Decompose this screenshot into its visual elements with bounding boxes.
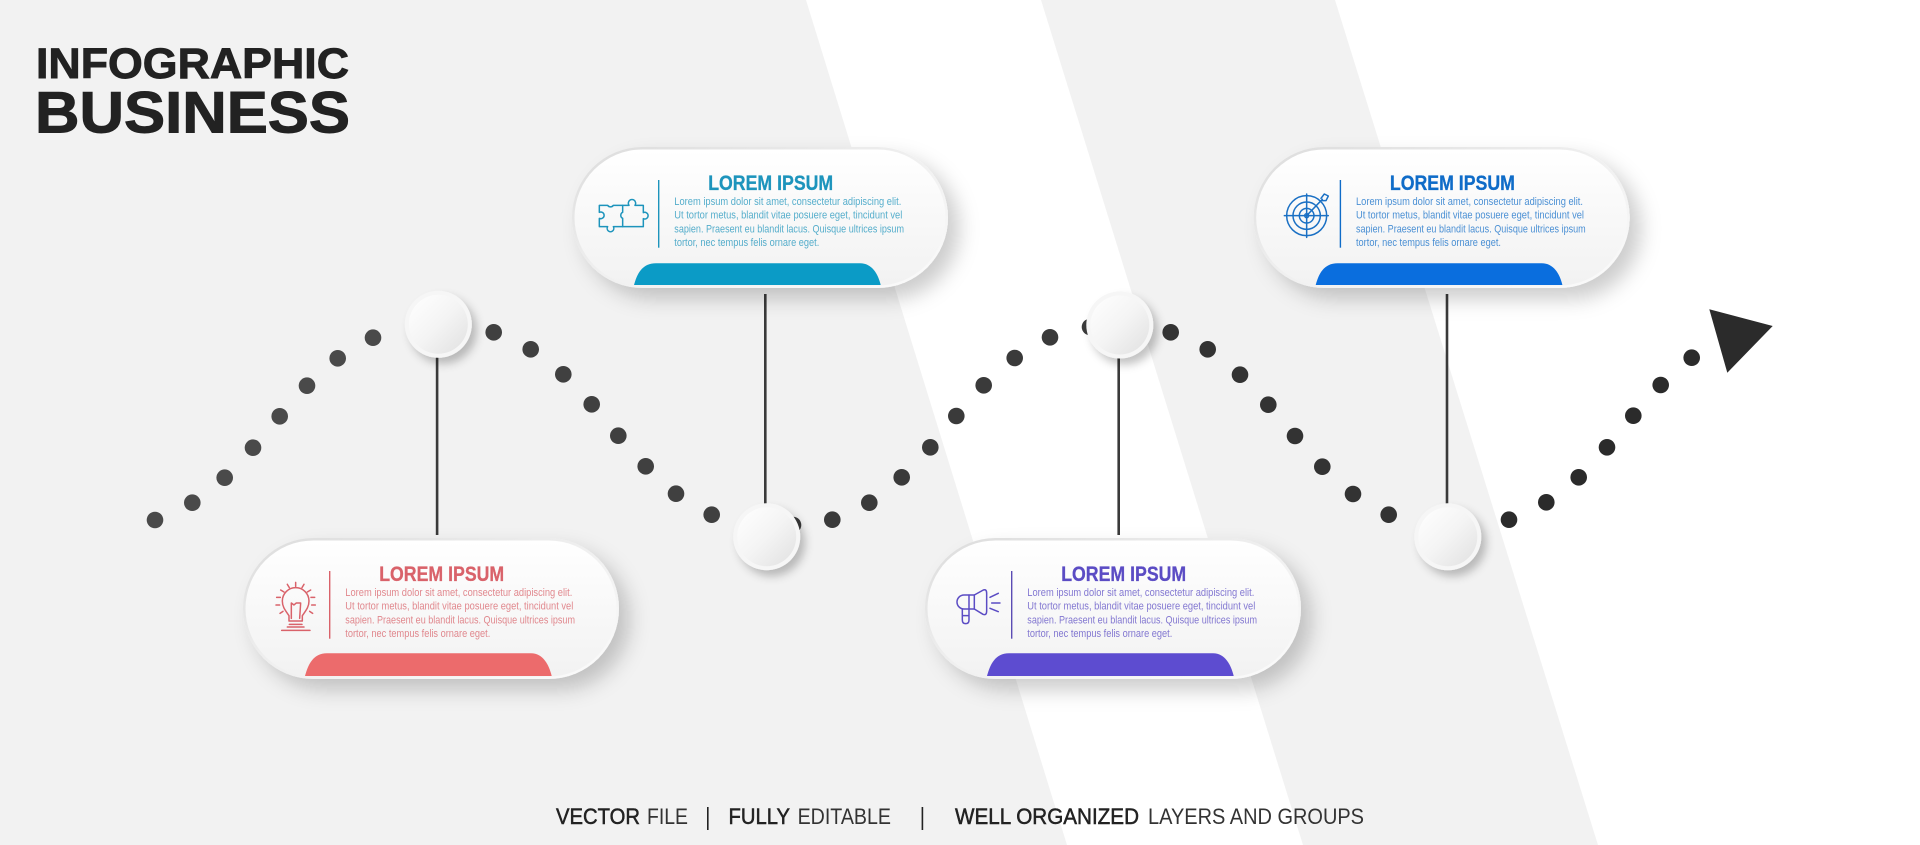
text block: Lorem ipsum dolor sit amet, consectetur adipiscing elit. bbox=[345, 587, 572, 599]
icon: puzzle bbox=[599, 200, 648, 232]
icon: target bbox=[1284, 194, 1328, 237]
panel: teal card bbox=[572, 147, 948, 288]
dots: first fall bbox=[485, 324, 720, 523]
heading: LOREM IPSUM bbox=[708, 172, 833, 195]
text block: Ut tortor metus, blandit vitae posuere eget, tincidunt vel bbox=[674, 210, 902, 222]
text block: tortor, nec tempus felis ornare eget. bbox=[1356, 237, 1501, 249]
dots: second fall bbox=[1162, 324, 1397, 523]
text block: sapien. Praesent eu blandit lacus. Quisque ultrices ipsum bbox=[345, 614, 575, 626]
icon: megaphone bbox=[957, 590, 1000, 624]
node circles bbox=[405, 291, 1481, 570]
panel: pink card bbox=[243, 538, 619, 679]
node 1 bbox=[405, 291, 472, 358]
text block bbox=[1356, 196, 1586, 249]
title bbox=[35, 40, 350, 146]
panel: purple card bbox=[925, 538, 1301, 679]
footer text: LAYERS AND GROUPS bbox=[1148, 804, 1364, 829]
text block: Lorem ipsum dolor sit amet, consectetur adipiscing elit. bbox=[1356, 196, 1583, 208]
dotted path with arrow bbox=[147, 309, 1773, 533]
dots: final rise bbox=[1501, 349, 1700, 528]
heading: LOREM IPSUM bbox=[1390, 172, 1515, 195]
text block bbox=[1027, 587, 1257, 640]
heading: LOREM IPSUM bbox=[379, 563, 504, 586]
footer text: FILE bbox=[647, 804, 688, 829]
text block: tortor, nec tempus felis ornare eget. bbox=[674, 237, 819, 249]
icon: light bulb bbox=[276, 582, 315, 630]
arrow head bbox=[1709, 309, 1773, 373]
text block: Ut tortor metus, blandit vitae posuere eget, tincidunt vel bbox=[345, 601, 573, 613]
title: INFOGRAPHIC bbox=[36, 40, 349, 88]
dots: second rise bbox=[785, 319, 1098, 533]
node 2 bbox=[733, 503, 800, 570]
node 4 bbox=[1414, 503, 1481, 570]
text block: Ut tortor metus, blandit vitae posuere eget, tincidunt vel bbox=[1356, 210, 1584, 222]
node 3 bbox=[1086, 292, 1153, 358]
text block: Ut tortor metus, blandit vitae posuere eget, tincidunt vel bbox=[1027, 601, 1255, 613]
text block: sapien. Praesent eu blandit lacus. Quisque ultrices ipsum bbox=[674, 223, 904, 235]
text block: tortor, nec tempus felis ornare eget. bbox=[1027, 628, 1172, 640]
dots: first rise bbox=[147, 329, 381, 528]
footer text: FULLY bbox=[728, 804, 790, 829]
text block: Lorem ipsum dolor sit amet, consectetur adipiscing elit. bbox=[674, 196, 901, 208]
footer text: WELL ORGANIZED bbox=[955, 804, 1139, 829]
footer text: VECTOR bbox=[556, 804, 640, 829]
footer text: EDITABLE bbox=[798, 804, 891, 829]
text block: sapien. Praesent eu blandit lacus. Quisque ultrices ipsum bbox=[1027, 614, 1257, 626]
footer text bbox=[556, 804, 1364, 830]
text block: Lorem ipsum dolor sit amet, consectetur adipiscing elit. bbox=[1027, 587, 1254, 599]
text block: sapien. Praesent eu blandit lacus. Quisque ultrices ipsum bbox=[1356, 223, 1586, 235]
text block: tortor, nec tempus felis ornare eget. bbox=[345, 628, 490, 640]
text block bbox=[674, 196, 904, 249]
heading: LOREM IPSUM bbox=[1061, 563, 1186, 586]
connector lines bbox=[436, 294, 1448, 535]
text block bbox=[345, 587, 575, 640]
panel: blue card bbox=[1254, 147, 1630, 288]
title: BUSINESS bbox=[35, 80, 350, 146]
